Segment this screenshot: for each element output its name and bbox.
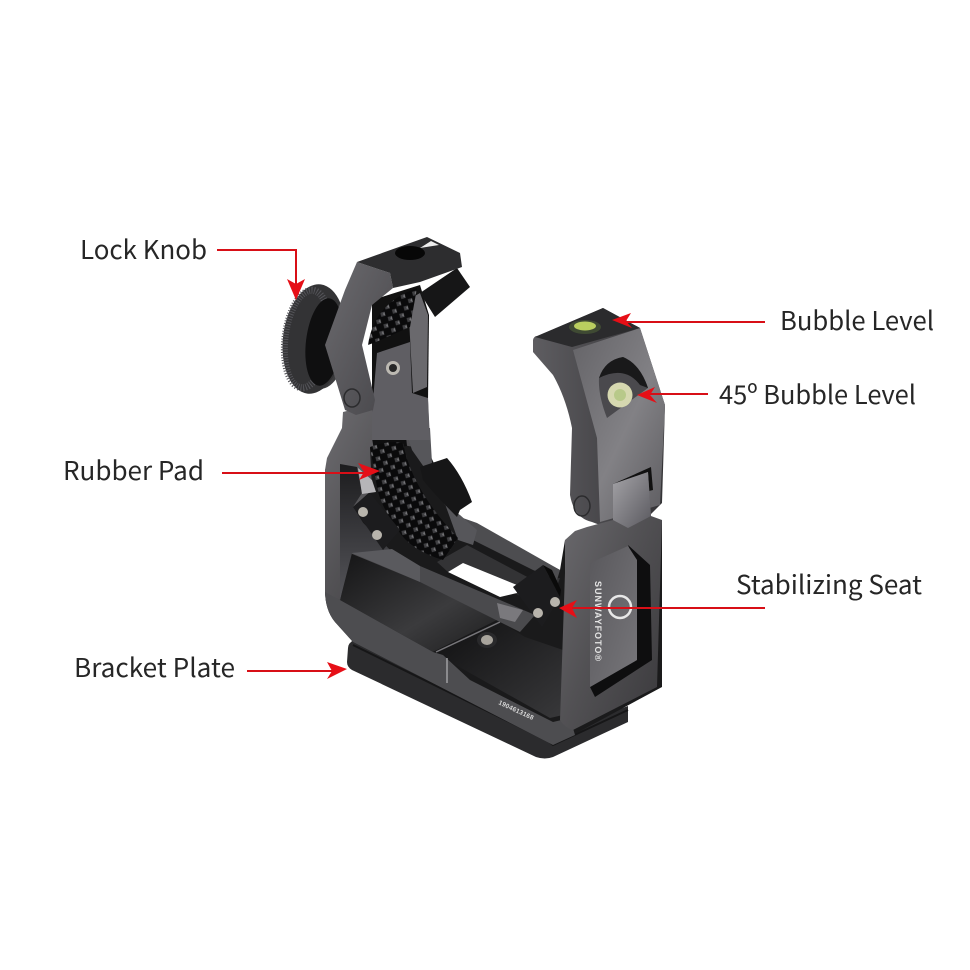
arrow: Stabilizing Seat [559,600,765,618]
serial number: 1904613168 [497,699,535,722]
floor screw [477,632,497,648]
45 degree bubble level [599,357,648,418]
top bubble level [569,320,601,334]
label: Bubble Level: Bubble Level [780,301,934,338]
label: Bracket Plate: Bracket Plate [74,648,235,685]
arrow: 45 degree Bubble Level [637,387,708,403]
floor [340,555,563,718]
right stabilizing seat [513,565,561,627]
label: 45 degree Bubble Level: 45º Bubble Level [719,375,916,412]
slide plate [347,640,628,758]
strap hole [395,246,425,260]
left upper arm [325,237,470,440]
logo ring [609,596,631,618]
lower claw [420,458,472,517]
bracket product illustration [277,237,665,758]
right column [560,472,662,730]
label: Lock Knob: Lock Knob [80,230,207,267]
left stabilizing seat [353,493,400,550]
right arm [533,308,665,525]
frame underlay [325,430,662,745]
label: Rubber Pad: Rubber Pad [63,451,204,488]
arrow: Bracket Plate [247,662,347,679]
front wall [325,590,575,745]
left column [325,392,477,600]
arrow: Rubber Pad [222,463,380,480]
arrow: Bubble Level [612,313,765,328]
lower rubber pad [370,442,458,560]
arrow: Lock Knob [217,250,305,300]
label: Stabilizing Seat: Stabilizing Seat [736,565,922,602]
logo text: SUNWAYFOTO® [593,581,603,661]
back rail and opening [420,517,560,632]
alignment mark [420,241,439,248]
knob [277,281,351,397]
